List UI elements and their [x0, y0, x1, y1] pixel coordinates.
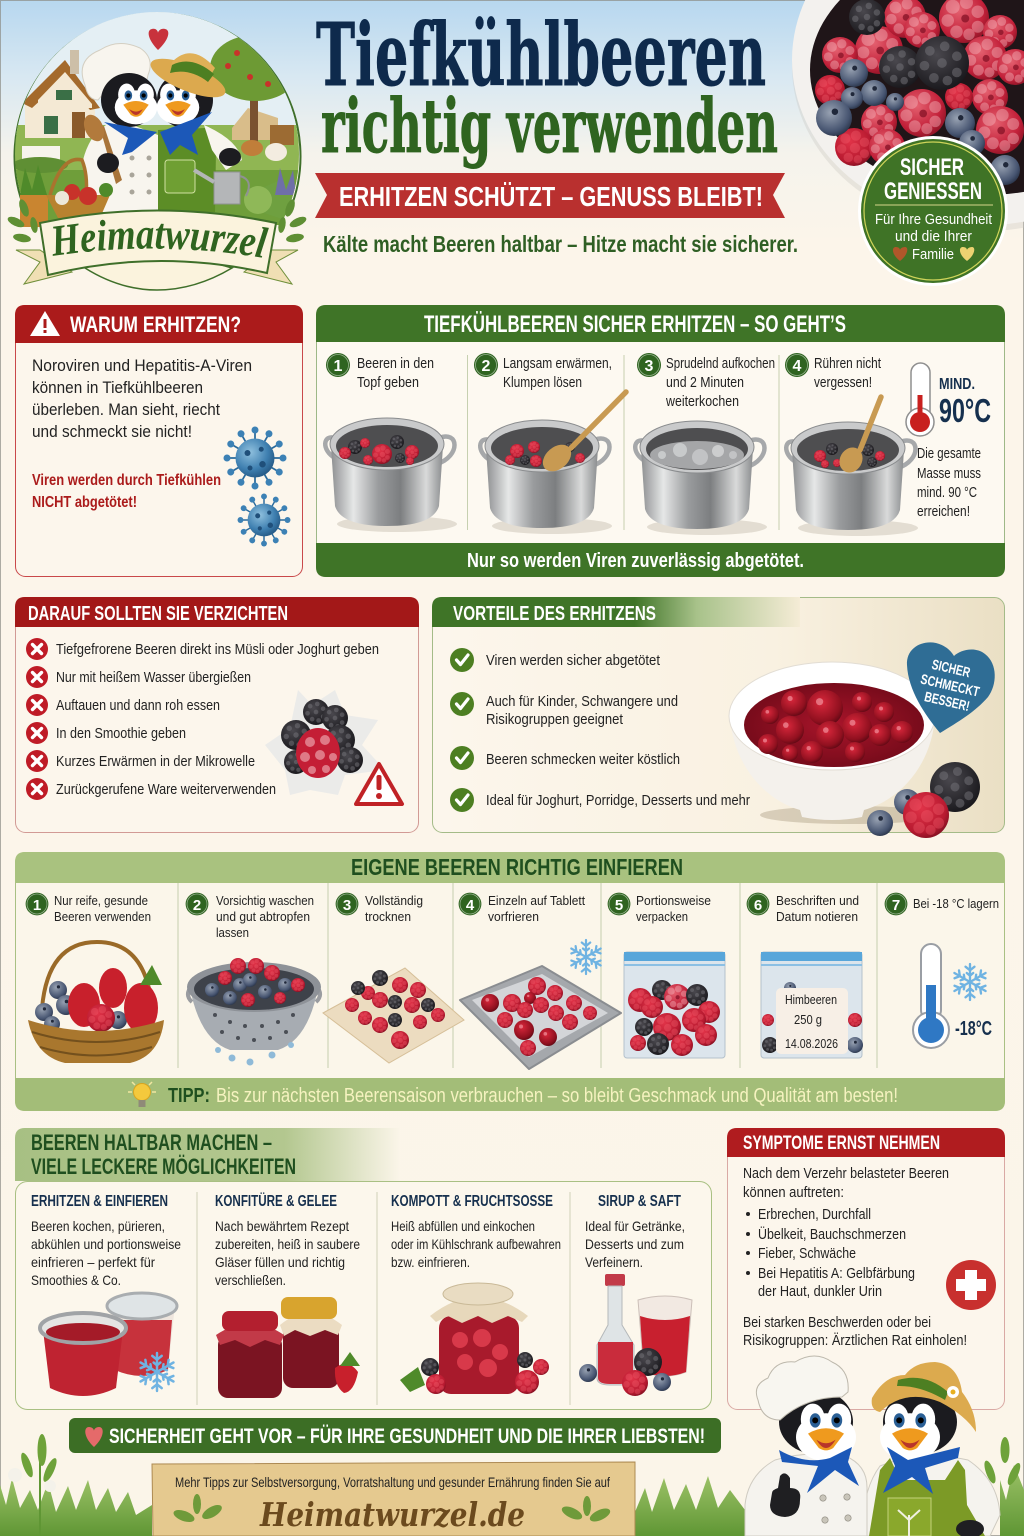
text: symptome: Fieber, Schwäche	[758, 1245, 856, 1262]
panel: beeren haltbar machen	[15, 1128, 712, 1410]
step 7: lagern: -18°C	[955, 1018, 992, 1040]
icon: leaves right	[560, 1496, 612, 1524]
step 4: vorfrieren	[459, 893, 621, 1069]
step 4: Rühren nicht	[814, 355, 882, 372]
step 1: Topf geben	[357, 374, 419, 391]
step 4: vorfrieren: Einzeln auf Tablett	[488, 893, 585, 908]
column: konfitüre und gelee: verschließen.	[215, 1272, 286, 1288]
step 3: trocknen	[323, 893, 464, 1063]
step 3	[635, 353, 775, 535]
column: sirup und saft: SIRUP & SAFT	[598, 1193, 681, 1210]
panel header: haltbar	[15, 1128, 400, 1181]
icon: blue heart: BESSER!	[923, 688, 971, 714]
badge: sicher geniessen: und die Ihrer	[895, 228, 972, 245]
step 4: vergessen!	[814, 374, 872, 391]
step 6: beschriften: 14.08.2026	[785, 1036, 838, 1051]
logo: Heimatwurzel penguins	[8, 12, 306, 291]
column: kompott und fruchtsosse: bzw. einfrieren.	[391, 1254, 470, 1270]
list: verzichten: In den Smoothie geben	[56, 725, 186, 742]
panel header: haltbar: BEEREN HALTBAR MACHEN –	[31, 1130, 272, 1155]
step 3: und 2 Minuten	[666, 374, 744, 391]
icon: blue heart: SICHER	[930, 656, 972, 680]
step 7: lagern: Bei -18 °C lagern	[913, 896, 999, 911]
penguin: gardener	[862, 1362, 1000, 1536]
column: sirup und saft: Ideal für Getränke,	[585, 1218, 685, 1234]
callout: 90 degrees: Masse muss	[917, 465, 981, 482]
step 2: waschen: und gut abtropfen	[216, 909, 310, 924]
column: erhitzen und einfrieren	[31, 1193, 181, 1396]
wooden sign: Heimatwurzel.de	[259, 1495, 525, 1534]
column: sirup und saft: Desserts und zum	[585, 1236, 684, 1252]
footer: tipp: Bis zur nächsten Beerensaison verbrauchen – so bleibt Geschmack und Qualität am besten!	[216, 1085, 898, 1107]
list: vorteile: Viren werden sicher abgetötet	[486, 652, 661, 669]
illustration: frozen berries	[265, 690, 385, 795]
step 2: 2	[482, 358, 491, 375]
text: warnung: NICHT abgetötet!	[32, 494, 137, 511]
text: symptome: der Haut, dunkler Urin	[758, 1283, 882, 1300]
panel header: warum erhitzen: WARUM ERHITZEN?	[70, 312, 241, 337]
step 3: weiterkochen	[665, 393, 739, 410]
logo wordmark: Heimatwurzel	[52, 220, 269, 258]
text: warnung: Viren werden durch Tiefkühlen	[32, 472, 221, 489]
banner: sicherheit geht vor: SICHERHEIT GEHT VOR – FÜR IHRE GESUNDHEIT UND DIE IHRER LIEBSTEN!	[109, 1425, 705, 1448]
column: sirup und saft	[579, 1193, 692, 1396]
column: kompott und fruchtsosse: Heiß abfüllen und einkochen	[391, 1218, 535, 1234]
column: konfitüre und gelee: Gläser füllen und richtig	[215, 1254, 345, 1270]
step 2: Langsam erwärmen,	[503, 355, 612, 372]
berries beside bowl	[867, 762, 980, 838]
icon: warning triangle	[356, 764, 402, 804]
text: symptome: Risikogruppen: Ärztlichen Rat einholen!	[743, 1332, 967, 1349]
panel header: vorteile: VORTEILE DES ERHITZENS	[453, 603, 656, 625]
panel header: einfrieren: EIGENE BEEREN RICHTIG EINFIEREN	[351, 854, 683, 880]
panel header: symptome	[727, 1128, 1005, 1157]
step 1: Beeren in den	[357, 355, 434, 372]
step 1	[325, 353, 457, 532]
badge: sicher geniessen: Für Ihre Gesundheit	[875, 211, 993, 228]
panel header: symptome: SYMPTOME ERNST NEHMEN	[743, 1133, 940, 1154]
step 3: trocknen: 3	[343, 897, 351, 914]
wooden sign: Mehr Tipps zur Selbstversorgung, Vorratshaltung und gesunder Ernährung finden Sie auf	[175, 1474, 610, 1490]
footer: so geht's: Nur so werden Viren zuverlässig abgetötet.	[467, 550, 804, 572]
badge: sicher geniessen: GENIESSEN	[884, 178, 982, 205]
callout: 90 degrees: MIND.	[939, 376, 975, 393]
step 5: verpacken: Portionsweise	[636, 893, 711, 908]
step 2: Klumpen lösen	[503, 374, 582, 391]
panel: so geht's	[316, 305, 1005, 577]
step 7: lagern: 7	[892, 897, 900, 914]
panel header: vorteile	[432, 597, 800, 627]
penguin: chef	[745, 1356, 867, 1536]
step 6: beschriften: 6	[754, 897, 762, 914]
step 2: waschen: lassen	[216, 925, 249, 940]
text: warum: und schmeckt sie nicht!	[32, 422, 192, 441]
step 2: waschen	[186, 893, 321, 1066]
column: konfitüre und gelee	[215, 1191, 360, 1398]
panel header: so geht's: TIEFKÜHLBEEREN SICHER ERHITZEN – SO GEHT’S	[424, 311, 846, 338]
text: warnung	[32, 472, 221, 511]
badge: sicher geniessen: Familie	[912, 246, 954, 263]
footer: tipp	[15, 1078, 1005, 1111]
step 3: Sprudelnd aufkochen	[666, 355, 775, 372]
step 1: reife beeren: 1	[33, 897, 41, 914]
step 1: reife beeren: Nur reife, gesunde	[54, 893, 148, 908]
panel header: so geht's	[316, 305, 1005, 342]
icon: medical cross	[946, 1260, 996, 1310]
step 5: verpacken: verpacken	[636, 909, 688, 924]
panel header: einfrieren	[15, 852, 1005, 883]
wooden sign	[152, 1462, 635, 1536]
column: sirup und saft: Verfeinern.	[585, 1254, 643, 1270]
column: erhitzen und einfrieren: abkühlen und portionsweise	[31, 1236, 181, 1252]
column: konfitüre und gelee: KONFITÜRE & GELEE	[215, 1191, 337, 1210]
list: verzichten: Kurzes Erwärmen in der Mikrowelle	[56, 753, 255, 770]
step 3: trocknen: trocknen	[365, 909, 411, 924]
list: verzichten: Nur mit heißem Wasser übergießen	[56, 669, 251, 686]
text: warum	[32, 356, 252, 441]
step 4: vorfrieren: vorfrieren	[488, 909, 539, 924]
column: kompott und fruchtsosse: oder im Kühlschrank aufbewahren	[391, 1236, 561, 1252]
badge: sicher geniessen	[858, 136, 1008, 286]
column: erhitzen und einfrieren: ERHITZEN & EINFIEREN	[31, 1193, 168, 1210]
step 4: 4	[793, 358, 802, 375]
step 6: beschriften: Himbeeren	[785, 992, 837, 1007]
badge: sicher geniessen: SICHER	[900, 154, 964, 181]
panel: eigene beeren einfrieren	[15, 852, 1005, 1111]
icon: heart	[149, 29, 168, 50]
callout: 90 degrees	[917, 376, 991, 520]
text: warum: Noroviren und Hepatitis-A-Viren	[32, 356, 252, 375]
list: vorteile: Beeren schmecken weiter köstlich	[486, 751, 680, 768]
panel: warum erhitzen	[15, 305, 303, 576]
list: vorteile: Ideal für Joghurt, Porridge, Desserts und mehr	[486, 792, 750, 809]
column: erhitzen und einfrieren: einfrieren – perfekt für	[31, 1254, 155, 1270]
column: konfitüre und gelee: Nach bewährtem Rezept	[215, 1218, 349, 1234]
ribbon: ERHITZEN SCHÜTZT – GENUSS BLEIBT!	[339, 181, 763, 212]
step 3: trocknen: Vollständig	[365, 893, 423, 908]
text: symptome	[743, 1165, 967, 1349]
callout: 90 degrees: mind. 90 °C	[917, 484, 977, 501]
step 4	[785, 353, 918, 536]
step 1: 1	[334, 358, 343, 375]
panel header: warum erhitzen	[15, 305, 303, 343]
step 6: beschriften	[747, 893, 863, 1058]
panel: darauf sollten sie verzichten	[15, 597, 419, 832]
step 6: beschriften: 250 g	[794, 1012, 822, 1027]
bowl of frozen berries	[792, 0, 1024, 231]
text: symptome: Übelkeit, Bauchschmerzen	[758, 1225, 906, 1243]
callout: 90 degrees: 90°C	[939, 392, 991, 429]
step 5: verpacken: 5	[615, 897, 623, 914]
text: symptome: Bei starken Beschwerden oder bei	[743, 1314, 931, 1331]
column: kompott und fruchtsosse: KOMPOTT & FRUCHTSOSSE	[391, 1193, 553, 1210]
column: kompott und fruchtsosse	[391, 1193, 561, 1394]
column: erhitzen und einfrieren: Smoothies & Co.	[31, 1272, 121, 1288]
column: konfitüre und gelee: zubereiten, heiß in saubere	[215, 1236, 360, 1252]
panel header: verzichten	[15, 597, 419, 627]
panel header: verzichten: DARAUF SOLLTEN SIE VERZICHTEN	[28, 603, 288, 625]
list: verzichten: Auftauen und dann roh essen	[56, 697, 220, 714]
step 3: 3	[645, 358, 654, 375]
column: erhitzen und einfrieren: Beeren kochen, pürieren,	[31, 1218, 165, 1234]
callout: 90 degrees: Die gesamte	[917, 445, 981, 462]
text: symptome: können auftreten:	[743, 1184, 844, 1201]
callout: 90 degrees: erreichen!	[917, 503, 970, 520]
banner: sicherheit geht vor	[69, 1418, 721, 1453]
text: warum: können in Tiefkühlbeeren	[32, 378, 203, 397]
step 1: reife beeren: Beeren verwenden	[54, 909, 151, 924]
panel header: haltbar: VIELE LECKERE MÖGLICHKEITEN	[31, 1154, 296, 1179]
step 1: reife beeren	[26, 893, 164, 1063]
subtitle: Kälte macht Beeren haltbar – Hitze macht sie sicherer.	[323, 231, 798, 257]
step 4: vorfrieren: 4	[466, 897, 475, 914]
ribbon	[315, 173, 785, 218]
step 6: beschriften: Beschriften und	[776, 893, 859, 908]
list: verzichten	[26, 638, 379, 800]
list: vorteile	[450, 648, 750, 812]
panel: vorteile des erhitzens	[432, 597, 1004, 838]
list: verzichten: Zurückgerufene Ware weiterverwenden	[56, 781, 276, 798]
step 2: waschen: 2	[193, 897, 201, 914]
text: symptome: Bei Hepatitis A: Gelbfärbung	[758, 1265, 915, 1282]
text: warum: überleben. Man sieht, riecht	[32, 400, 220, 419]
icon: thermometer	[906, 363, 934, 436]
step 2: waschen: Vorsichtig waschen	[216, 893, 314, 908]
illustration: cooked berries bowl	[729, 662, 940, 824]
list: verzichten: Tiefgefrorene Beeren direkt ins Müsli oder Joghurt geben	[56, 641, 379, 658]
icon: viruses	[224, 426, 290, 546]
icon: leaves left	[172, 1494, 224, 1524]
list: vorteile: Risikogruppen geeignet	[486, 711, 624, 728]
icon: blue heart: SCHMECKT	[919, 671, 981, 700]
step 6: beschriften: Datum notieren	[776, 909, 858, 924]
step 5: verpacken	[608, 893, 725, 1058]
step 2	[474, 353, 626, 534]
step 7: lagern	[885, 893, 999, 1048]
icon: light bulb	[128, 1082, 156, 1107]
text: symptome: Erbrechen, Durchfall	[758, 1206, 871, 1223]
footer: so geht's	[316, 543, 1005, 577]
list: vorteile: Auch für Kinder, Schwangere und	[486, 693, 678, 710]
panel: symptome ernst nehmen	[727, 1128, 1005, 1410]
footer: tipp: TIPP:	[168, 1085, 210, 1107]
grass	[0, 1434, 1024, 1536]
icon: blue heart	[907, 642, 995, 733]
text: symptome: Nach dem Verzehr belasteter Beeren	[743, 1165, 949, 1182]
